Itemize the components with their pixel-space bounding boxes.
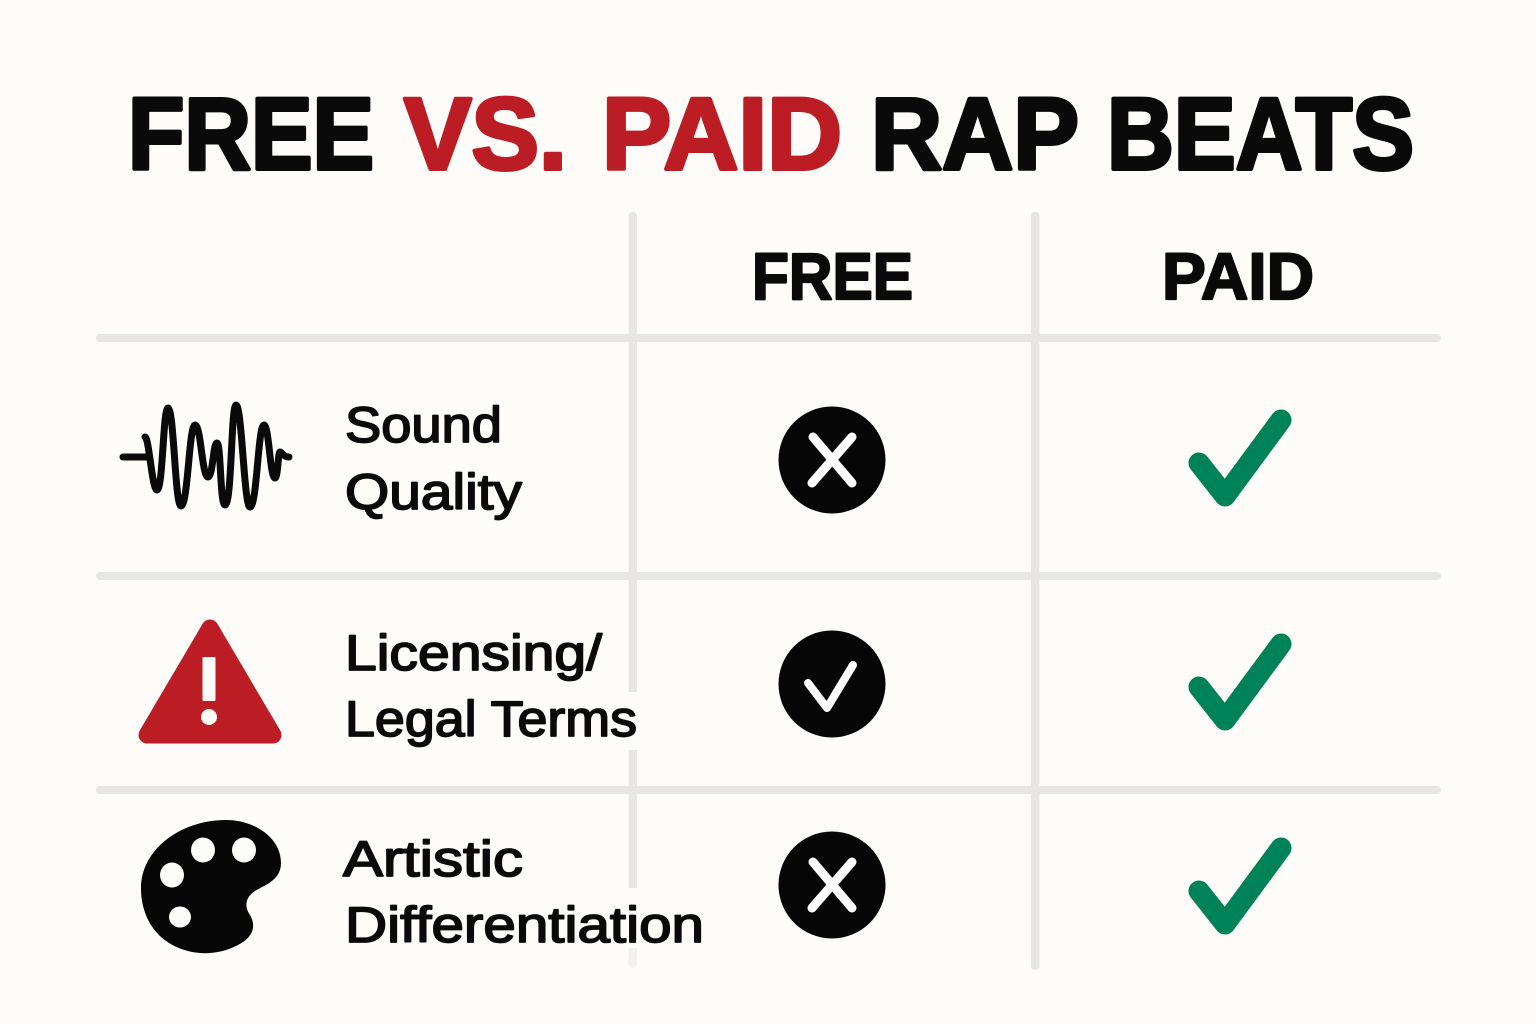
title: PAID bbox=[602, 77, 842, 191]
icon: paid check mark bbox=[1199, 848, 1281, 924]
label: sound quality: Sound bbox=[345, 397, 502, 453]
icon: warning triangle bbox=[147, 628, 273, 735]
icon: free check mark bbox=[778, 630, 886, 738]
column heading: free: FREE bbox=[752, 239, 913, 313]
row: licensing and legal terms bbox=[147, 625, 1281, 747]
label: sound quality: Quality bbox=[345, 464, 522, 520]
icon: paint palette bbox=[141, 820, 281, 953]
title: FREE bbox=[128, 77, 374, 191]
row: sound quality bbox=[123, 397, 1281, 520]
label: sound quality bbox=[345, 397, 522, 520]
label: artistic differentiation: Differentiation bbox=[345, 897, 704, 953]
label: licensing and legal terms bbox=[345, 625, 637, 747]
title: RAP bbox=[871, 77, 1079, 191]
icon: free x mark bbox=[778, 406, 886, 514]
icon: paid check mark bbox=[1199, 644, 1281, 720]
row: artistic differentiation bbox=[141, 820, 1281, 953]
icon: sound waveform bbox=[123, 405, 289, 507]
label: licensing and legal terms: Licensing/ bbox=[345, 625, 602, 681]
label: artistic differentiation: Artistic bbox=[343, 831, 523, 887]
label: licensing and legal terms: Legal Terms bbox=[345, 691, 637, 747]
title bbox=[128, 77, 1414, 191]
label: artistic differentiation bbox=[343, 831, 704, 953]
title: BEATS bbox=[1107, 77, 1414, 191]
column heading: paid: PAID bbox=[1162, 239, 1314, 313]
title: VS. bbox=[404, 77, 567, 191]
icon: free x mark bbox=[778, 832, 886, 938]
icon: paid check mark bbox=[1199, 420, 1281, 496]
